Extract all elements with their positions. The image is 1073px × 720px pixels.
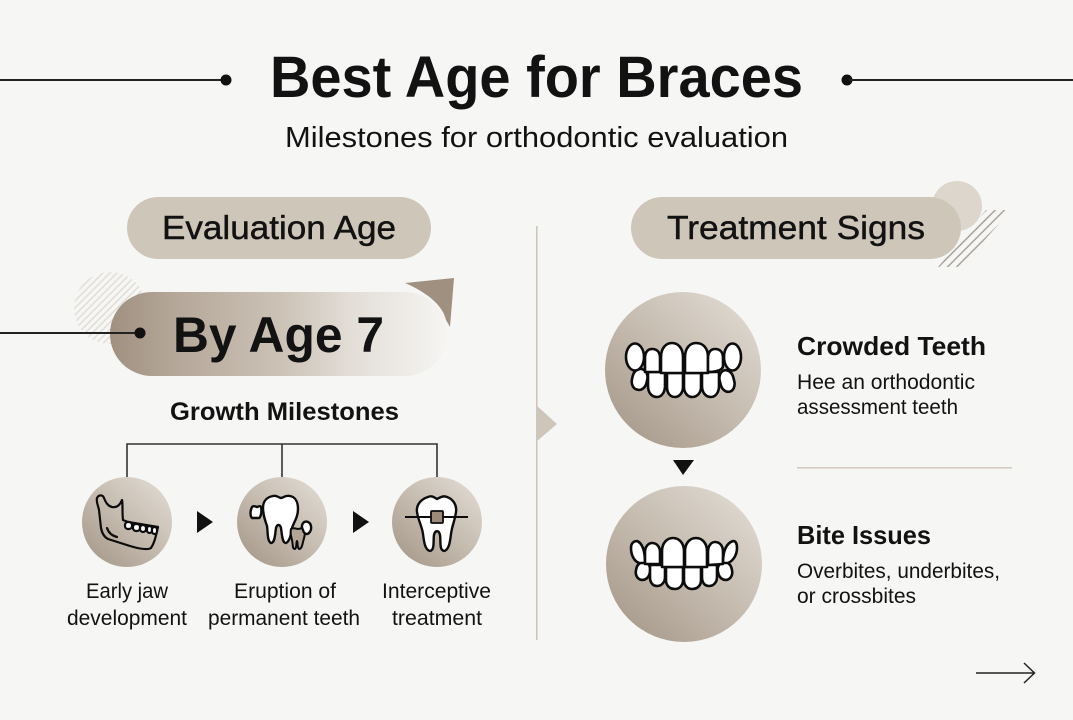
heading pill: treatment signs xyxy=(631,197,961,259)
milestone: early jaw development xyxy=(82,477,172,567)
heading pill: evaluation age xyxy=(127,197,431,259)
connector tree xyxy=(127,444,437,477)
decoration: hatched circle xyxy=(74,272,146,344)
text block: bite issues: Bite Issues xyxy=(797,520,931,550)
heading pill: treatment signs: Treatment Signs xyxy=(667,209,925,246)
icon: jaw xyxy=(97,495,158,549)
icon: molar with erupting teeth xyxy=(250,496,311,549)
text block: bite issues: or crossbites xyxy=(797,585,916,608)
divider between signs xyxy=(797,467,1012,469)
title: Best Age for Braces xyxy=(270,45,803,110)
label: interceptive treatment: Interceptive xyxy=(382,580,491,603)
arrow: next xyxy=(976,663,1034,683)
text block: crowded teeth: Hee an orthodontic xyxy=(797,371,975,394)
icon: crowded teeth xyxy=(626,343,741,397)
label: eruption of permanent teeth: permanent teeth xyxy=(208,607,360,630)
label: early jaw development: Early jaw xyxy=(86,580,169,603)
header rule: right xyxy=(842,74,1073,86)
sign: bite issues illustration xyxy=(606,486,762,642)
heading: growth milestones: Growth Milestones xyxy=(170,398,399,426)
subtitle: Milestones for orthodontic evaluation xyxy=(285,122,788,154)
text block: crowded teeth: assessment teeth xyxy=(797,396,958,419)
callout connector line xyxy=(0,328,146,338)
panel: treatment signs xyxy=(605,181,1012,642)
label: interceptive treatment: treatment xyxy=(392,607,482,630)
icon: tooth with bracket xyxy=(405,496,468,551)
callout: by age 7: By Age 7 xyxy=(173,307,384,363)
milestone: eruption of permanent teeth xyxy=(237,477,327,567)
callout: by age 7 xyxy=(110,292,447,376)
arrow xyxy=(197,511,213,533)
milestone: interceptive treatment xyxy=(392,477,482,567)
arrow xyxy=(353,511,369,533)
panel: evaluation age xyxy=(0,197,491,630)
decoration: circle xyxy=(932,181,982,231)
decoration: corner pennant xyxy=(405,278,454,327)
arrow: down xyxy=(673,460,694,475)
label: early jaw development: development xyxy=(67,607,187,630)
sign: crowded teeth illustration xyxy=(605,292,761,448)
icon: bite teeth xyxy=(631,538,737,589)
center divider xyxy=(536,226,557,640)
text block: crowded teeth xyxy=(797,331,986,419)
heading pill: evaluation age: Evaluation Age xyxy=(162,209,396,246)
text block: bite issues: Overbites, underbites, xyxy=(797,560,1000,583)
text block: crowded teeth: Crowded Teeth xyxy=(797,331,986,361)
decoration: hatching xyxy=(938,210,1011,267)
label: eruption of permanent teeth: Eruption of xyxy=(234,580,336,603)
header rule: left xyxy=(0,74,232,86)
text block: bite issues xyxy=(797,520,1000,608)
